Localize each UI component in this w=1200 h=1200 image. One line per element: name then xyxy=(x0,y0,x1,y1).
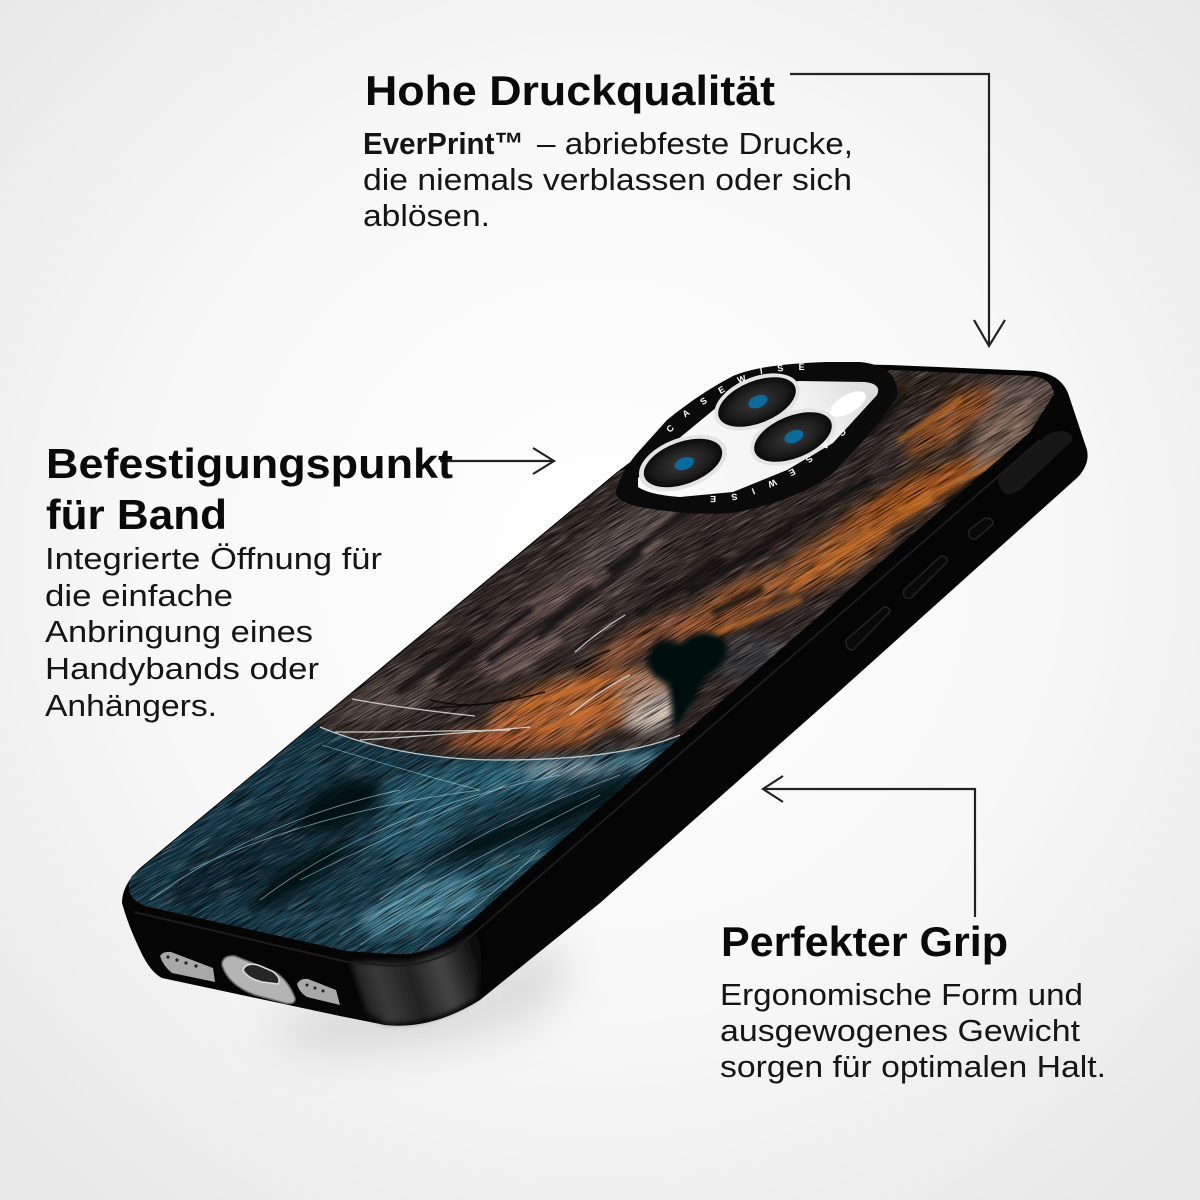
body text xyxy=(45,541,382,723)
arrow: strap attachment xyxy=(440,448,554,474)
body text xyxy=(720,977,1106,1084)
fox muzzle xyxy=(619,683,691,741)
fox nose xyxy=(647,632,728,732)
body text: die niemals verblassen oder sich xyxy=(363,162,852,197)
fur: upper colours xyxy=(331,369,1068,757)
body text xyxy=(363,126,853,233)
body text: EverPrint™ xyxy=(363,126,524,161)
body text: Integrierte Öffnung für xyxy=(45,541,382,576)
body text: Ergonomische Form und xyxy=(720,977,1083,1012)
callout: Hohe Druckqualität xyxy=(363,67,853,233)
whiskers xyxy=(320,615,680,760)
speaker left xyxy=(160,952,215,982)
body text: ausgewogenes Gewicht xyxy=(720,1013,1080,1048)
case body xyxy=(122,364,1088,1026)
heading: Befestigungspunkt xyxy=(46,440,453,487)
lens plate xyxy=(638,381,878,497)
ring lettering: CASEWISE xyxy=(710,429,846,502)
arrow: grip xyxy=(763,776,975,917)
fur streaks: orange xyxy=(520,400,1010,730)
heading: Hohe Druckqualität xyxy=(365,67,775,114)
callout: Befestigungspunkt xyxy=(45,440,453,723)
phone case xyxy=(122,362,1088,1028)
printed artwork: fox fur xyxy=(129,370,1054,954)
heading: Perfekter Grip xyxy=(721,918,1008,965)
speaker right xyxy=(297,979,340,1005)
phone shadow xyxy=(268,931,581,1055)
body text: Handybands oder xyxy=(45,651,319,686)
lens right xyxy=(742,397,844,477)
body text: sorgen für optimalen Halt. xyxy=(720,1049,1106,1084)
heading: für Band xyxy=(46,491,227,538)
blue water reflection xyxy=(129,725,680,954)
lens left xyxy=(631,424,735,502)
body text: die einfache xyxy=(45,578,233,613)
blue strands xyxy=(150,745,620,950)
ring lettering: CASEWISE xyxy=(666,364,804,432)
glossy bottom corner xyxy=(350,932,481,1023)
side buttons xyxy=(846,431,1073,650)
lens top xyxy=(706,362,808,442)
heading xyxy=(46,440,453,538)
camera bump xyxy=(616,362,898,514)
body text: Anhängers. xyxy=(45,688,217,723)
arrow: print quality xyxy=(790,74,1005,346)
body text: ablösen. xyxy=(363,198,490,233)
callout: Perfekter Grip xyxy=(720,918,1106,1084)
fur texture xyxy=(129,370,1054,954)
body text: Anbringung eines xyxy=(45,614,313,649)
fox nose surround xyxy=(712,633,786,683)
fur streaks: tan xyxy=(500,400,1030,680)
bottom ports xyxy=(160,952,340,1005)
usb-c port xyxy=(222,956,295,1003)
camera ring xyxy=(616,362,897,514)
fur streaks: dark xyxy=(400,395,1000,690)
body text: – abriebfeste Drucke, xyxy=(537,126,853,161)
case rim highlight xyxy=(134,440,1040,966)
ring lettering xyxy=(666,364,846,502)
dark strands xyxy=(430,650,610,708)
blue dark bands xyxy=(242,766,645,918)
